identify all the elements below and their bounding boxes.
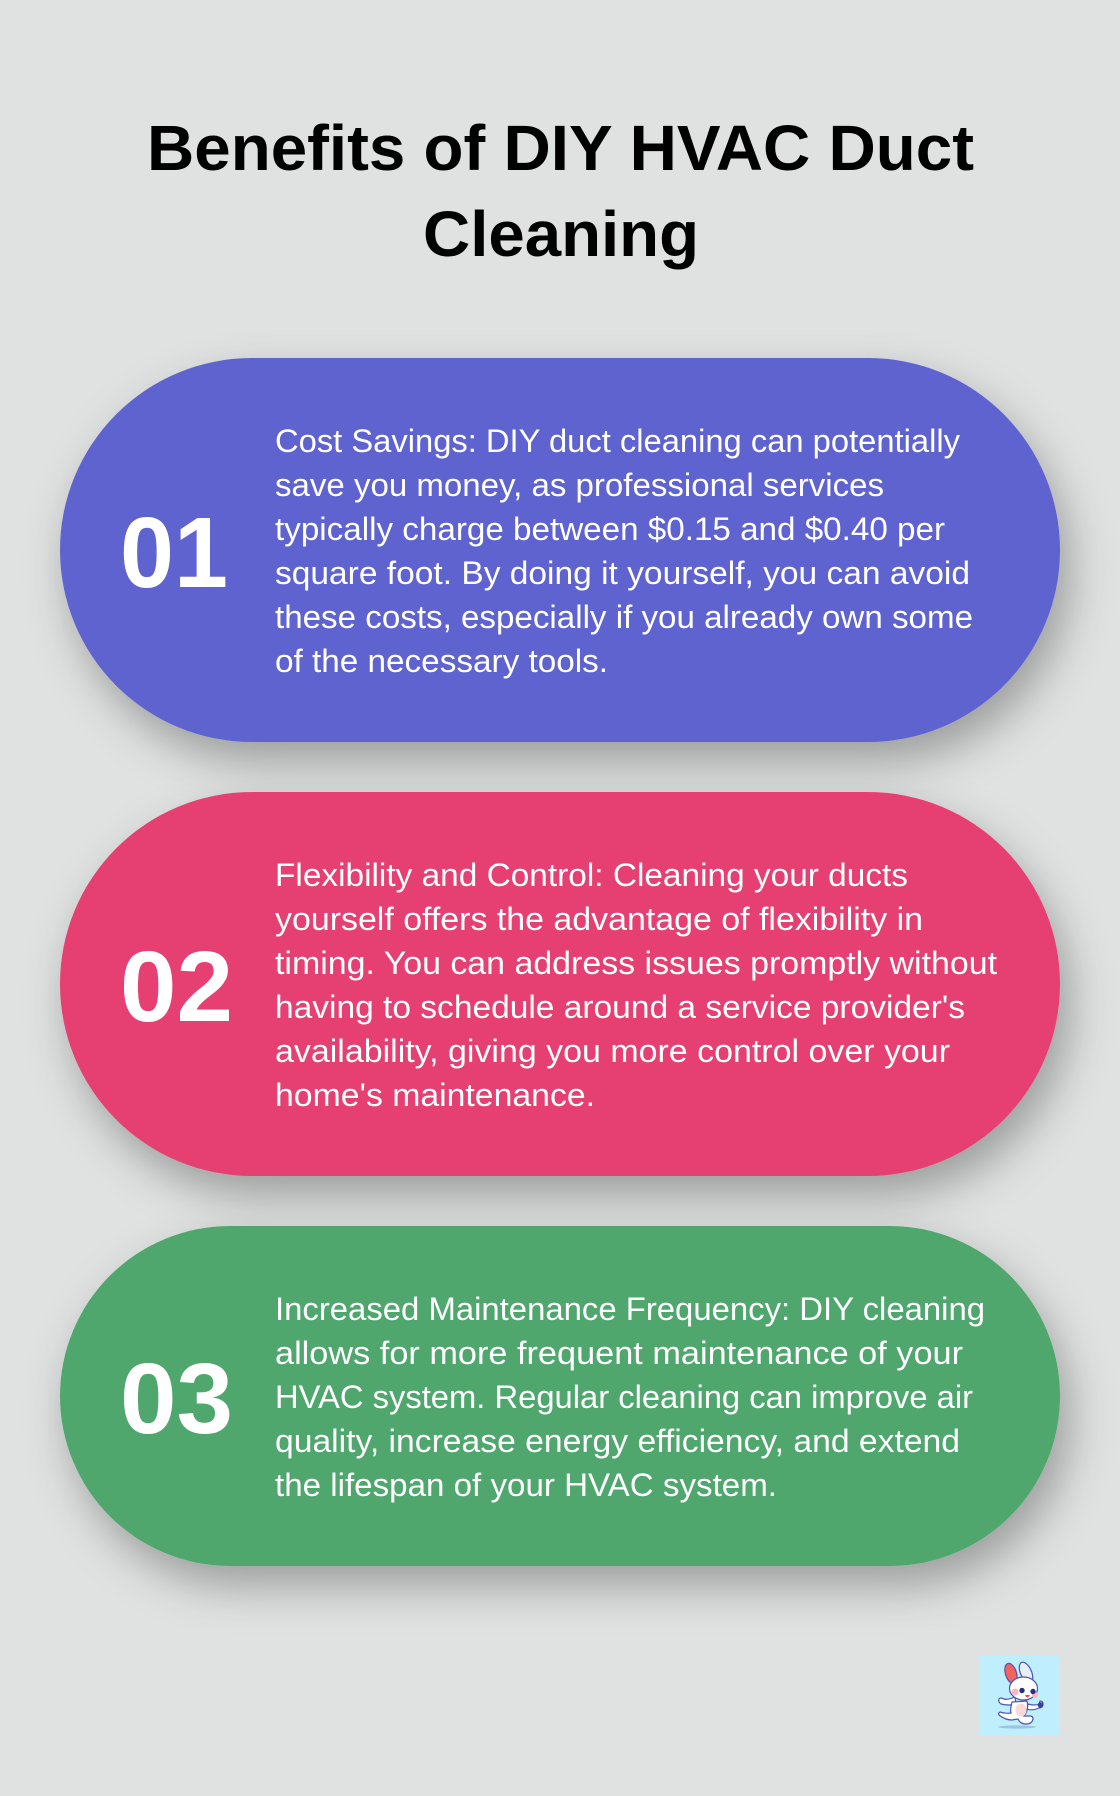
- text: flexibility and control: Flexibility and Control: Cleaning your ducts: [275, 857, 908, 893]
- text: cost savings: typically charge between $0.15 and $0.40 per: [275, 511, 945, 547]
- text: flexibility and control: yourself offers the advantage of flexibility in: [275, 901, 923, 937]
- text: flexibility and control: availability, giving you more control over your: [275, 1033, 950, 1069]
- text: flexibility and control: timing. You can address issues promptly without: [275, 945, 997, 981]
- number 02: 02: [120, 931, 233, 1043]
- panel: cost savings: [60, 358, 1060, 742]
- text: increased maintenance frequency: HVAC system. Regular cleaning can improve air: [275, 1379, 973, 1415]
- text: cost savings: of the necessary tools.: [275, 643, 608, 679]
- number 03: 03: [120, 1343, 233, 1455]
- text: cost savings: Cost Savings: DIY duct cleaning can potentially: [275, 423, 960, 459]
- text: increased maintenance frequency: Increased Maintenance Frequency: DIY cleaning: [275, 1291, 985, 1327]
- title: Cleaning: [423, 198, 699, 270]
- text: flexibility and control: having to schedule around a service provider's: [275, 989, 965, 1025]
- title: Benefits of DIY HVAC Duct: [147, 112, 974, 184]
- panel: increased maintenance frequency: [60, 1226, 1060, 1566]
- text: increased maintenance frequency: quality, increase energy efficiency, and extend: [275, 1423, 960, 1459]
- text: cost savings: [275, 423, 973, 679]
- text: flexibility and control: [275, 857, 997, 1113]
- text: increased maintenance frequency: allows for more frequent maintenance of your: [275, 1335, 963, 1371]
- text: increased maintenance frequency: the lifespan of your HVAC system.: [275, 1467, 777, 1503]
- icon: running bunny logo: [980, 1656, 1060, 1736]
- text: cost savings: square foot. By doing it yourself, you can avoid: [275, 555, 970, 591]
- title: [147, 112, 974, 270]
- panel: flexibility and control: [60, 792, 1060, 1176]
- number 01: 01: [120, 497, 228, 609]
- text: cost savings: these costs, especially if you already own some: [275, 599, 973, 635]
- text: cost savings: save you money, as professional services: [275, 467, 884, 503]
- text: increased maintenance frequency: [275, 1291, 985, 1503]
- text: flexibility and control: home's maintenance.: [275, 1077, 595, 1113]
